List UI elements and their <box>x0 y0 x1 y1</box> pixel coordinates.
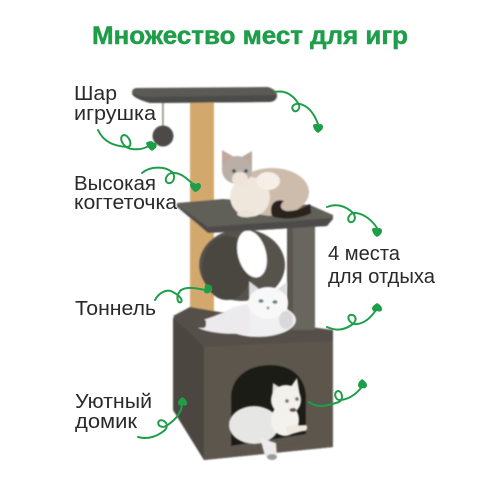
label: tall scratching post: когтеточка <box>74 192 178 214</box>
label: 4 resting places: для отдыха <box>328 266 436 288</box>
cat: bottom white in house <box>229 378 307 460</box>
top platform <box>132 87 277 103</box>
label: 4 resting places <box>328 243 436 288</box>
arrow: to ball <box>98 130 157 151</box>
label: ball toy: Шар <box>74 83 117 105</box>
label: tunnel: Тоннель <box>75 298 156 320</box>
arrow: lower shelf <box>327 303 382 330</box>
arrow: to post <box>142 168 201 192</box>
sisal post <box>190 100 214 320</box>
right column <box>287 222 315 330</box>
cat tree <box>132 87 333 460</box>
arrow: middle platform <box>327 205 382 237</box>
house opening <box>231 365 306 455</box>
label: tall scratching post: Высокая <box>74 173 156 195</box>
middle platform <box>177 199 333 233</box>
arrow: inside house <box>309 379 367 406</box>
hanging ball toy <box>152 103 174 146</box>
arrow: tunnel <box>155 284 212 302</box>
arrow: top platform <box>275 92 323 133</box>
label: cozy house: домик <box>75 411 137 433</box>
tunnel <box>199 227 285 301</box>
label: ball toy: игрушка <box>74 103 157 125</box>
base house <box>173 307 333 460</box>
cat: middle white <box>196 281 296 337</box>
label: cozy house: Уютный <box>75 391 152 413</box>
title: Множество мест для игр <box>92 22 408 50</box>
label: tall scratching post <box>74 173 178 214</box>
label: cozy house <box>75 391 152 433</box>
cat: top siamese <box>222 150 311 218</box>
label: 4 resting places: 4 места <box>328 243 401 265</box>
label: ball toy <box>74 83 157 125</box>
arrow: house <box>138 397 187 438</box>
